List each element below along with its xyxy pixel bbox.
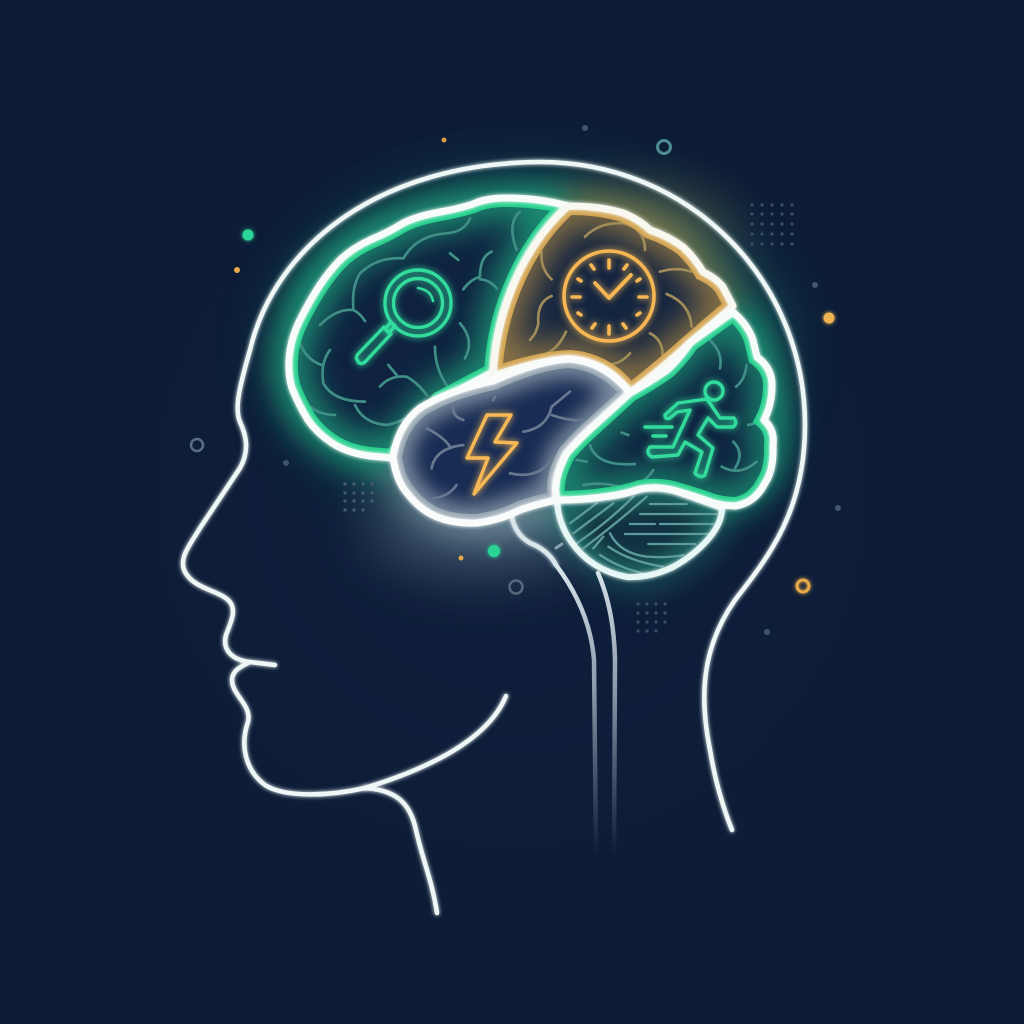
icon: lightning bolt (467, 415, 517, 494)
brain ambient glow (280, 180, 780, 577)
lobe: orange time region (493, 206, 733, 393)
lobe: cerebellum (557, 488, 722, 577)
orange lobe folds (530, 223, 692, 365)
dot grid left (343, 482, 374, 512)
icon: running figure (645, 382, 736, 477)
energy lobe folds (427, 392, 587, 498)
head outline (183, 162, 805, 913)
icon: clock (564, 251, 654, 341)
decorative particles (191, 125, 841, 635)
lobe: frontal (green) (289, 198, 568, 458)
frontal folds (300, 212, 520, 425)
brain stem (512, 518, 615, 855)
cerebellum folds (570, 497, 717, 573)
dot grid upper right (750, 203, 794, 246)
motor lobe folds (577, 340, 767, 487)
icon: magnifying glass (356, 270, 451, 364)
lobe: motor region (green) (556, 312, 773, 506)
dot grid lower (636, 602, 667, 633)
lobe: energy region (grey blue) (393, 359, 630, 523)
illustration: neon head and brain (176, 125, 841, 918)
